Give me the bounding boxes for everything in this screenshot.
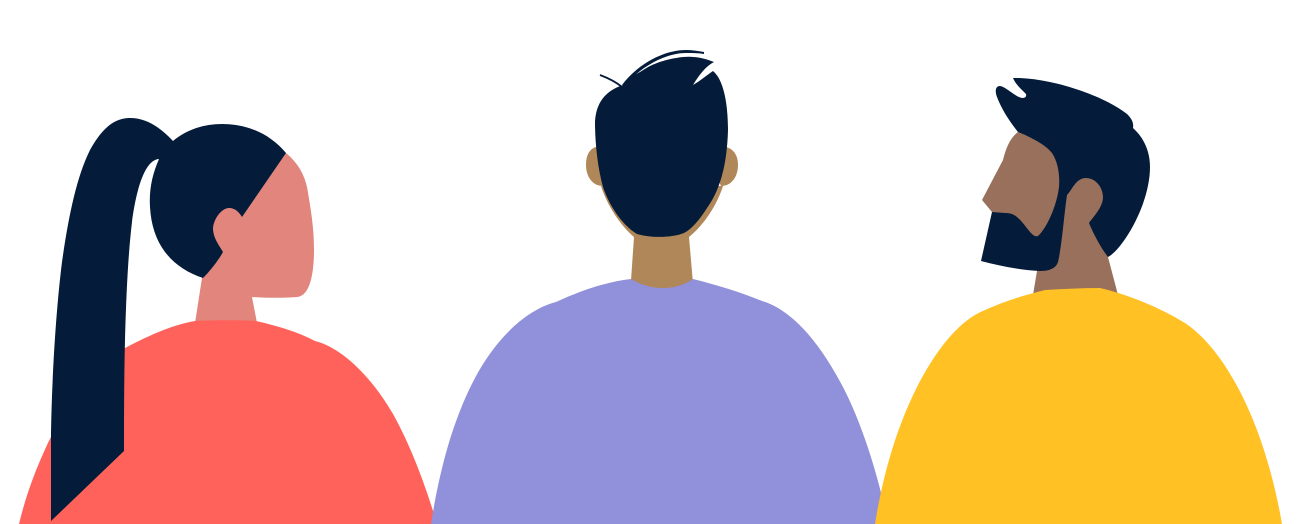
bearded man neck and face	[982, 132, 1118, 295]
bearded man sweater	[875, 288, 1282, 524]
man hair	[595, 57, 728, 237]
woman sweater	[19, 320, 437, 524]
man ear right	[712, 147, 738, 186]
bearded man hair and beard	[981, 78, 1150, 271]
woman hair and ponytail	[51, 118, 286, 521]
person: woman with ponytail	[19, 118, 437, 524]
man hair wisp short	[600, 75, 622, 87]
man hair wisp long	[622, 50, 704, 85]
person: bearded man in profile	[875, 78, 1282, 524]
person: man seen from behind	[431, 50, 888, 524]
man face and neck	[601, 186, 723, 295]
man ear left	[586, 147, 610, 186]
woman neck and face	[195, 153, 314, 323]
man sweater	[431, 279, 888, 524]
